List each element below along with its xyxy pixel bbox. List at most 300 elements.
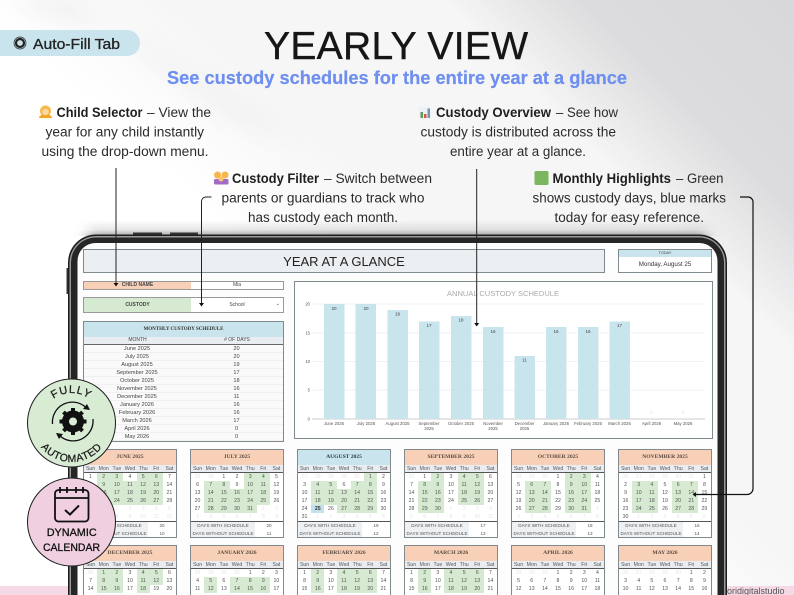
- calendar: April 2026: Sun: [514, 562, 523, 568]
- callout: monthly highlights: shows custody days, blue marks: [532, 190, 726, 206]
- calendar: January 2026: 30: [221, 570, 227, 576]
- monthly custody table rows: 20: [233, 346, 240, 352]
- calendar: December 2025: 1: [102, 570, 105, 576]
- callout: custody filter: – Switch between: [324, 171, 432, 186]
- monthly custody table rows: October 2025: [120, 378, 154, 384]
- calendar: June 2025: 22: [88, 498, 93, 504]
- calendar: February 2026: 7: [382, 570, 385, 576]
- calendar: November 2025: 5: [664, 482, 666, 488]
- calendar: February 2026: 2: [316, 570, 319, 576]
- calendar: July 2025: 3: [249, 474, 252, 480]
- calendar: February 2026: Wed: [339, 562, 349, 568]
- calendar: August 2025: 6: [343, 482, 345, 488]
- calendar: April 2026: Tue: [540, 562, 549, 568]
- calendar: November 2025: 28: [649, 474, 655, 480]
- calendar: October 2025: [511, 449, 605, 538]
- calendar: July 2025: 27: [195, 506, 200, 512]
- calendar: April 2026: 11: [595, 578, 600, 584]
- calendar: January 2026: Fri: [260, 562, 266, 568]
- calendar: December 2025: 2: [115, 570, 118, 576]
- calendar: January 2026: 12: [208, 586, 214, 592]
- calendar: February 2026: 15: [302, 586, 307, 592]
- calendar: November 2025: 14: [694, 531, 700, 536]
- calendar: July 2025: 6: [196, 482, 199, 488]
- calendar: December 2025: Sat: [166, 562, 173, 568]
- calendar: October 2025: Fri: [581, 466, 587, 472]
- calendar: October 2025: Wed: [553, 466, 563, 472]
- calendar: February 2026: 3: [329, 570, 332, 576]
- calendar: December 2025: Sun: [86, 562, 95, 568]
- calendar: August 2025: Fri: [367, 466, 373, 472]
- calendar: September 2025: 9: [436, 482, 439, 488]
- calendar: February 2026: 21: [381, 586, 386, 592]
- calendar: June 2025: 17: [114, 490, 120, 496]
- icon: family: [214, 172, 228, 184]
- calendar: March 2026: 6: [476, 570, 479, 576]
- calendar: June 2025: 9: [102, 482, 105, 488]
- calendar: February 2026: 6: [369, 570, 372, 576]
- calendar: July 2025: Thu: [246, 466, 255, 472]
- calendar: January 2026: 4: [196, 578, 199, 584]
- calendar: September 2025: Sat: [487, 466, 494, 472]
- calendar: May 2026: Sat: [701, 562, 708, 568]
- calendar: August 2025: 6: [382, 514, 385, 520]
- bar chart: annual custody schedule: 0: [308, 416, 311, 422]
- badge: dynamic calendar: [28, 478, 116, 566]
- calendar: August 2025: 31: [302, 514, 307, 520]
- calendar: January 2026: 29: [208, 570, 214, 576]
- icon: green square: [534, 171, 548, 185]
- calendar: June 2025: DAYS WITHOUT SCHEDULE: [85, 531, 147, 536]
- calendar: April 2026: 3: [583, 570, 586, 576]
- calendar: July 2025: 11: [267, 531, 271, 536]
- calendar: August 2025: 28: [315, 474, 321, 480]
- calendar: July 2025: 2: [275, 506, 278, 512]
- calendar: June 2025: 7: [102, 514, 105, 520]
- bar chart: annual custody schedule: September: [418, 421, 440, 426]
- calendar: April 2026: Sat: [594, 562, 601, 568]
- calendar: May 2026: Thu: [674, 562, 683, 568]
- spreadsheet title bar: [83, 249, 605, 273]
- calendar: August 2025: 16: [381, 490, 386, 496]
- calendar: July 2025: 30: [208, 474, 214, 480]
- calendar: November 2025: 3: [664, 514, 666, 520]
- calendar: May 2026: 14: [675, 586, 681, 592]
- calendar: June 2025: 5: [168, 506, 171, 512]
- calendar: November 2025: 4: [650, 482, 653, 488]
- bar chart: annual custody schedule: ANNUAL CUSTODY SCHEDULE: [447, 289, 559, 298]
- calendar: October 2025: 31: [581, 506, 587, 512]
- calendar: June 2025: 11: [154, 514, 159, 520]
- calendar: June 2025: 3: [115, 474, 118, 480]
- calendar: May 2026: MAY 2026: [652, 550, 678, 556]
- calendar: March 2026: Fri: [474, 562, 480, 568]
- calendar: October 2025: 30: [542, 474, 548, 480]
- calendar: April 2026: 13: [529, 586, 535, 592]
- calendar: October 2025: 14: [542, 490, 548, 496]
- calendar: July 2025: 21: [208, 498, 214, 504]
- calendar: June 2025: 25: [127, 498, 133, 504]
- calendar: August 2025: Sun: [300, 466, 309, 472]
- bar chart: annual custody schedule: May 2026: [674, 421, 693, 426]
- calendar: October 2025: 29: [555, 506, 561, 512]
- calendar: February 2026: 4: [343, 570, 345, 576]
- calendar: December 2025: Tue: [112, 562, 121, 568]
- calendar: December 2025: 3: [129, 570, 131, 576]
- calendar: January 2026: 13: [221, 586, 227, 592]
- callout: custody overview: – See how: [556, 105, 618, 120]
- calendar: March 2026: 18: [448, 586, 454, 592]
- calendar: June 2025: 1: [89, 474, 92, 480]
- calendar: June 2025: 12: [140, 482, 146, 488]
- monthly custody schedule table: MONTHLY CUSTODY SCHEDULE: [144, 327, 223, 332]
- calendar: September 2025: 11: [461, 482, 467, 488]
- calendar: June 2025: 6: [155, 474, 158, 480]
- calendar: June 2025: 11: [127, 482, 133, 488]
- calendar: June 2025: Sun: [86, 466, 95, 472]
- calendar: June 2025: 26: [140, 498, 146, 504]
- calendar: October 2025: 6: [570, 514, 573, 520]
- calendar: April 2026: 30: [529, 570, 535, 576]
- calendar: October 2025: 23: [568, 498, 574, 504]
- calendar: November 2025: 30: [675, 474, 681, 480]
- calendar: March 2026: [404, 545, 498, 595]
- calendar: November 2025: 28: [688, 506, 694, 512]
- calendar: June 2025: 5: [142, 474, 145, 480]
- calendar: May 2026: [618, 545, 712, 595]
- calendar: August 2025: 2: [329, 514, 332, 520]
- calendar: June 2025: 2: [102, 474, 105, 480]
- calendar: June 2025: [83, 449, 177, 538]
- calendar: November 2025: 30: [623, 514, 628, 520]
- calendar: March 2026: 19: [461, 586, 467, 592]
- calendar: September 2025: 5: [476, 474, 479, 480]
- calendar: November 2025: Thu: [674, 466, 683, 472]
- calendar: July 2025: 1: [262, 506, 265, 512]
- calendar: January 2026: 10: [274, 578, 279, 584]
- calendar: November 2025: 6: [703, 514, 706, 520]
- monthly custody table rows: 11: [234, 394, 239, 400]
- calendar: October 2025: 4: [596, 474, 599, 480]
- calendar: August 2025: 25: [315, 506, 321, 512]
- calendar: September 2025: 13: [488, 482, 493, 488]
- calendar: December 2025: 30: [88, 570, 93, 576]
- calendar: August 2025: 12: [373, 531, 379, 536]
- calendar: August 2025: 29: [367, 506, 373, 512]
- calendar: October 2025: 15: [555, 490, 561, 496]
- calendar: March 2026: 15: [409, 586, 414, 592]
- calendar: August 2025: 11: [315, 490, 320, 496]
- calendar: March 2026: 3: [436, 570, 439, 576]
- calendar: September 2025: 21: [409, 498, 414, 504]
- calendar: October 2025: 21: [542, 498, 548, 504]
- calendar: November 2025: Mon: [634, 466, 644, 472]
- calendar: August 2025: 7: [356, 482, 359, 488]
- bar chart: annual custody schedule: February 2026: [574, 421, 603, 426]
- monthly custody table rows: 16: [233, 402, 240, 408]
- calendar: November 2025: 15: [702, 490, 707, 496]
- monthly custody table rows: 20: [233, 354, 240, 360]
- calendar: August 2025: 23: [381, 498, 386, 504]
- calendar: November 2025: 6: [677, 482, 680, 488]
- callout: custody filter: has custody each month.: [248, 210, 398, 225]
- callout: custody filter: parents or guardians to track who: [222, 190, 424, 206]
- today box: Monday, August 25: [639, 261, 691, 268]
- calendar: December 2025: 5: [155, 570, 158, 576]
- calendar: December 2025: 14: [88, 586, 93, 592]
- calendar: May 2026: 10: [623, 586, 628, 592]
- calendar: December 2025: 17: [127, 586, 133, 592]
- bar chart: annual custody schedule: 0: [650, 410, 653, 415]
- calendar: February 2026: [297, 545, 391, 595]
- monthly custody table rows: December 2025: [117, 394, 157, 400]
- calendar: November 2025: Wed: [660, 466, 670, 472]
- calendar: February 2026: Sun: [300, 562, 309, 568]
- calendar: November 2025: 2: [650, 514, 653, 520]
- bar chart: annual custody schedule: 10: [305, 359, 311, 364]
- child name selector row: [83, 281, 284, 290]
- calendar: June 2025: Sat: [166, 466, 173, 472]
- monthly custody table rows: August 2025: [121, 362, 153, 368]
- calendar: September 2025: 23: [435, 498, 441, 504]
- calendar: July 2025: 17: [247, 490, 253, 496]
- calendar: July 2025: 14: [208, 490, 214, 496]
- calendar: November 2025: Fri: [688, 466, 694, 472]
- calendar: April 2026: 8: [557, 578, 559, 584]
- bar chart: annual custody schedule: 16: [490, 329, 496, 334]
- calendar: August 2025: 5: [369, 514, 372, 520]
- calendar: June 2025: 16: [101, 490, 107, 496]
- callout: custody filter: Custody Filter: [232, 171, 320, 186]
- bar chart: annual custody schedule: 2025: [488, 426, 498, 431]
- calendar: June 2025: 30: [101, 506, 107, 512]
- calendar: May 2026: 1: [690, 570, 693, 576]
- calendar: October 2025: 1: [557, 474, 559, 480]
- calendar: June 2025: 4: [155, 506, 158, 512]
- calendar: October 2025: 3: [530, 514, 533, 520]
- monthly custody table rows: May 2026: [125, 434, 149, 440]
- calendar: May 2026: 12: [649, 586, 655, 592]
- calendar: November 2025: 25: [649, 506, 655, 512]
- monthly custody schedule table: MONTH: [128, 337, 147, 343]
- calendar: September 2025: 10: [474, 514, 480, 520]
- calendar: February 2026: Fri: [367, 562, 373, 568]
- calendar: July 2025: DAYS WITHOUT SCHEDULE: [192, 531, 254, 536]
- tag: Auto-Fill Tab: Auto-Fill Tab: [33, 36, 120, 53]
- calendar: February 2026: FEBRUARY 2026: [322, 550, 366, 556]
- calendar: September 2025: [404, 449, 498, 538]
- bar chart: annual custody schedule: 19: [395, 312, 400, 316]
- calendar: July 2025: 22: [221, 498, 227, 504]
- calendar: July 2025: 24: [247, 498, 253, 504]
- callout: custody filter: [214, 171, 432, 225]
- calendar: December 2025: 18: [140, 586, 146, 592]
- calendar: October 2025: 30: [568, 506, 574, 512]
- calendar: September 2025: 3: [450, 474, 452, 480]
- calendar: March 2026: 20: [474, 586, 480, 592]
- calendar: January 2026: 2: [262, 570, 265, 576]
- calendar: September 2025: 2: [436, 474, 439, 480]
- calendar: April 2026: 2: [570, 570, 573, 576]
- calendar: September 2025: 1: [423, 474, 426, 480]
- calendar: September 2025: 28: [409, 506, 414, 512]
- calendar: January 2026: 17: [274, 586, 279, 592]
- calendar: August 2025: 19: [373, 523, 379, 528]
- badge: fully automated: FULLY: [50, 385, 92, 398]
- calendar: October 2025: 7: [543, 482, 546, 488]
- calendar: June 2025: 2: [129, 506, 131, 512]
- calendar: September 2025: 16: [435, 490, 441, 496]
- bar chart: annual custody schedule: November: [483, 421, 503, 426]
- calendar: November 2025: DAYS WITHOUT SCHEDULE: [620, 531, 682, 536]
- calendar: May 2026: Sun: [621, 562, 630, 568]
- calendar: June 2025: 8: [115, 514, 118, 520]
- calendar: January 2026: Mon: [206, 562, 216, 568]
- calendar: November 2025: Sat: [701, 466, 708, 472]
- calendar: August 2025: 4: [356, 514, 359, 520]
- calendar: August 2025: 28: [354, 506, 360, 512]
- calendar: July 2025: Sun: [193, 466, 202, 472]
- calendar: September 2025: 26: [474, 498, 480, 504]
- calendar: November 2025: 12: [662, 490, 668, 496]
- calendar: July 2025: 29: [221, 506, 227, 512]
- calendar: October 2025: 5: [517, 482, 520, 488]
- calendar: July 2025: 2: [236, 474, 238, 480]
- calendar: July 2025: 4: [262, 474, 265, 480]
- calendar: March 2026: Sat: [487, 562, 494, 568]
- calendar: May 2026: 27: [636, 570, 642, 576]
- calendar: September 2025: 7: [436, 514, 439, 520]
- calendar: September 2025: 1: [450, 506, 452, 512]
- calendar: August 2025: [297, 449, 391, 538]
- calendar: November 2025: 5: [690, 514, 693, 520]
- title: YEARLY VIEW: [264, 25, 528, 68]
- calendar: July 2025: 6: [236, 514, 238, 520]
- monthly custody table rows: 0: [235, 434, 238, 440]
- calendar: April 2026: 29: [516, 570, 521, 576]
- calendar: June 2025: 27: [153, 498, 159, 504]
- custody filter row: School: [229, 302, 245, 308]
- calendar: March 2026: 11: [448, 578, 454, 584]
- calendar: July 2025: Tue: [219, 466, 228, 472]
- calendar: July 2025: 12: [274, 482, 279, 488]
- calendar: July 2025: 11: [261, 482, 266, 488]
- calendar: August 2025: DAYS WITH SCHEDULE: [304, 523, 356, 528]
- bar chart: annual custody schedule: June 2025: [324, 421, 345, 426]
- calendar: August 2025: 10: [302, 490, 307, 496]
- calendar: December 2025: 20: [167, 586, 172, 592]
- calendar: April 2026: 12: [516, 586, 521, 592]
- calendar: September 2025: SEPTEMBER 2025: [427, 454, 475, 460]
- subtitle: See custody schedules for the entire year at a glance: [167, 68, 627, 88]
- calendar: November 2025: Tue: [647, 466, 656, 472]
- calendar: May 2026: 11: [636, 586, 641, 592]
- calendar: March 2026: 7: [489, 570, 492, 576]
- calendar: May 2026: 29: [662, 570, 668, 576]
- bar chart: annual custody schedule: August 2025: [385, 421, 410, 426]
- calendar: November 2025: 14: [688, 490, 694, 496]
- calendar: July 2025: 26: [274, 498, 279, 504]
- calendar: September 2025: 8: [450, 514, 452, 520]
- calendar: August 2025: AUGUST 2025: [326, 454, 362, 460]
- calendar: April 2026: Wed: [553, 562, 563, 568]
- calendar: February 2026: 12: [354, 578, 360, 584]
- calendar: February 2026: 9: [316, 578, 319, 584]
- calendar: June 2025: JUNE 2025: [116, 454, 144, 460]
- calendar: May 2026: Wed: [660, 562, 670, 568]
- calendar: September 2025: 25: [461, 498, 467, 504]
- calendar: January 2026: 31: [234, 570, 240, 576]
- calendar: June 2025: 13: [153, 482, 159, 488]
- calendar: December 2025: [83, 545, 177, 595]
- calendar: February 2026: 13: [367, 578, 373, 584]
- calendar: December 2025: Fri: [153, 562, 159, 568]
- calendar: February 2026: Sat: [380, 562, 387, 568]
- calendar: March 2026: Mon: [420, 562, 430, 568]
- calendar: September 2025: Fri: [474, 466, 480, 472]
- calendar: January 2026: Tue: [219, 562, 228, 568]
- calendar: October 2025: 12: [516, 490, 521, 496]
- calendar: October 2025: 10: [581, 482, 587, 488]
- calendar: October 2025: 2: [570, 474, 573, 480]
- calendar: February 2026: 11: [341, 578, 347, 584]
- calendar: July 2025: Wed: [232, 466, 242, 472]
- calendar: October 2025: 8: [596, 514, 599, 520]
- calendar: September 2025: 29: [422, 506, 428, 512]
- bar chart: annual custody schedule: December: [515, 421, 535, 426]
- calendar: April 2026: Mon: [527, 562, 537, 568]
- calendar: June 2025: Thu: [139, 466, 148, 472]
- calendar: June 2025: 28: [167, 498, 172, 504]
- calendar: March 2026: MARCH 2026: [434, 550, 468, 556]
- calendar: September 2025: 17: [480, 523, 486, 528]
- calendar: September 2025: 17: [448, 490, 454, 496]
- calendar: July 2025: [190, 449, 284, 538]
- calendar: June 2025: 9: [129, 514, 131, 520]
- calendar: February 2026: 16: [315, 586, 321, 592]
- calendar: January 2026: [190, 545, 284, 595]
- calendar: April 2026: 1: [557, 570, 559, 576]
- calendar: August 2025: 22: [367, 498, 373, 504]
- calendar: August 2025: 4: [316, 482, 319, 488]
- calendar: July 2025: 5: [275, 474, 278, 480]
- calendar: June 2025: 3: [142, 506, 145, 512]
- calendar: August 2025: DAYS WITHOUT SCHEDULE: [299, 531, 361, 536]
- calendar: October 2025: 17: [581, 490, 587, 496]
- calendar: August 2025: 9: [382, 482, 385, 488]
- calendar: August 2025: 21: [354, 498, 360, 504]
- calendar: July 2025: 23: [234, 498, 240, 504]
- monthly custody table rows: July 2025: [125, 354, 149, 360]
- calendar: January 2026: 5: [209, 578, 212, 584]
- calendar: August 2025: 17: [302, 498, 307, 504]
- calendar: December 2025: 13: [167, 578, 172, 584]
- calendar: May 2026: 15: [688, 586, 694, 592]
- arrow: custody filter to custody row: [199, 197, 212, 306]
- calendar: July 2025: DAYS WITH SCHEDULE: [197, 523, 249, 528]
- calendar: July 2025: Fri: [260, 466, 266, 472]
- calendar: July 2025: 9: [236, 482, 238, 488]
- calendar: August 2025: 3: [303, 482, 306, 488]
- calendar: May 2026: 7: [677, 578, 680, 584]
- calendar: October 2025: 1: [596, 506, 599, 512]
- calendar: February 2026: 8: [303, 578, 306, 584]
- calendar: November 2025: 29: [662, 474, 668, 480]
- calendar: June 2025: 10: [114, 482, 120, 488]
- calendar: January 2026: 9: [262, 578, 265, 584]
- calendar: October 2025: 5: [557, 514, 559, 520]
- calendar: November 2025: 20: [675, 498, 681, 504]
